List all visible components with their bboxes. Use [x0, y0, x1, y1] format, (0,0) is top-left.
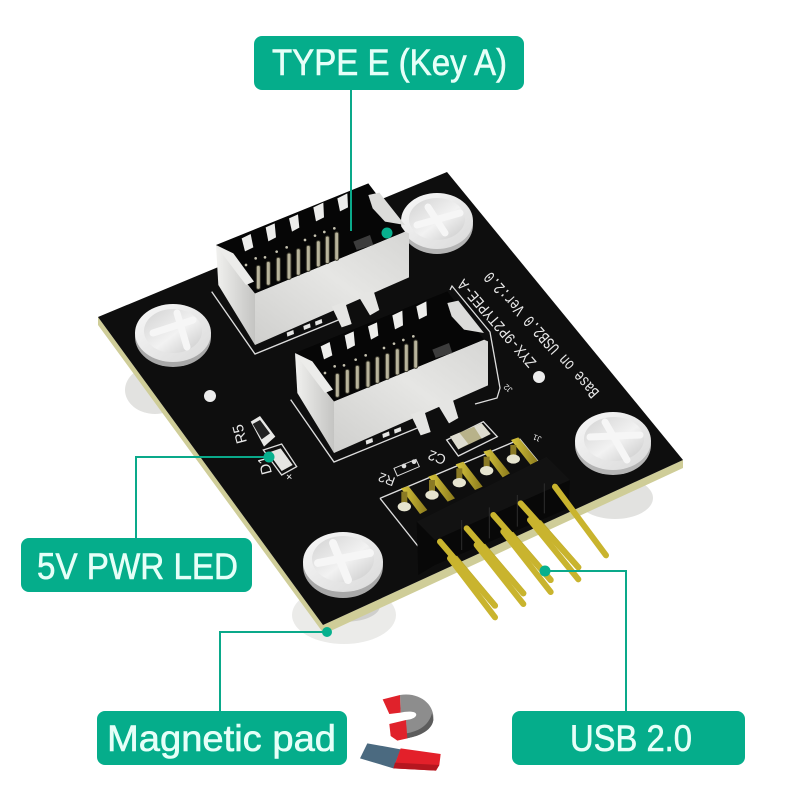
- marker: LED dot: [264, 452, 274, 462]
- icon: mounting screw right: [575, 412, 651, 475]
- callout: USB 2.0: USB 2.0: [570, 718, 692, 759]
- text: board model: ZYX-9P2TYPEE-A: [454, 275, 541, 371]
- callout: USB 2.0: [512, 711, 745, 765]
- callout: Magnetic pad: [97, 711, 347, 765]
- connector: lower box header: [291, 291, 488, 462]
- leader line: LED: [136, 457, 269, 538]
- component: R5 resistor: [251, 416, 275, 447]
- text: board version: Base on USB2.0 Ver:2.0: [481, 267, 604, 401]
- icon: magnets: [360, 694, 441, 771]
- marker: TYPE E dot: [382, 228, 392, 238]
- component: D1 LED: [263, 444, 297, 475]
- component: C2 capacitor: [447, 422, 497, 456]
- callout: TYPE E (Key A): TYPE E (Key A): [272, 42, 507, 83]
- black housing: [417, 457, 570, 575]
- leader line: USB 2.0: [545, 571, 626, 711]
- icon: mounting screw top right: [401, 193, 473, 254]
- callout: 5V PWR LED: 5V PWR LED: [37, 546, 238, 587]
- component: R2 resistor: [394, 459, 419, 476]
- board text: [229, 267, 604, 489]
- text: R2: R2: [376, 469, 397, 489]
- leader line: magnetic pad: [220, 632, 327, 711]
- back row of front pins: [440, 502, 578, 606]
- text: D1: D1: [254, 453, 276, 476]
- callout: Magnetic pad: Magnetic pad: [107, 718, 336, 759]
- callout: 5V PWR LED: [21, 538, 252, 592]
- text: J2: J2: [502, 382, 514, 394]
- front row pins: [440, 487, 606, 617]
- rear pins: [398, 437, 538, 514]
- text: J1: J1: [531, 432, 543, 444]
- silkscreen outline of lower header: [450, 286, 500, 404]
- mounting holes: [204, 371, 545, 402]
- icon: mounting screw left: [135, 304, 211, 367]
- callout: TYPE E (Key A): [254, 36, 524, 90]
- marker: magnetic pad dot: [322, 627, 332, 637]
- connector: USB 2.0 pin header: [380, 437, 606, 617]
- bar magnet: [360, 743, 441, 771]
- text: R5: R5: [229, 422, 251, 445]
- connector: upper box header: [212, 183, 409, 354]
- marker: USB 2.0 dot: [540, 566, 550, 576]
- text: C2: C2: [426, 447, 448, 468]
- leader line: TYPE E: [350, 90, 352, 231]
- icon: mounting screw bottom: [303, 532, 383, 598]
- horseshoe magnet: [383, 694, 433, 741]
- icon: magnetic pads under board: [125, 366, 653, 644]
- text: plus: +: [282, 470, 297, 484]
- panel: circuit board: [98, 172, 683, 634]
